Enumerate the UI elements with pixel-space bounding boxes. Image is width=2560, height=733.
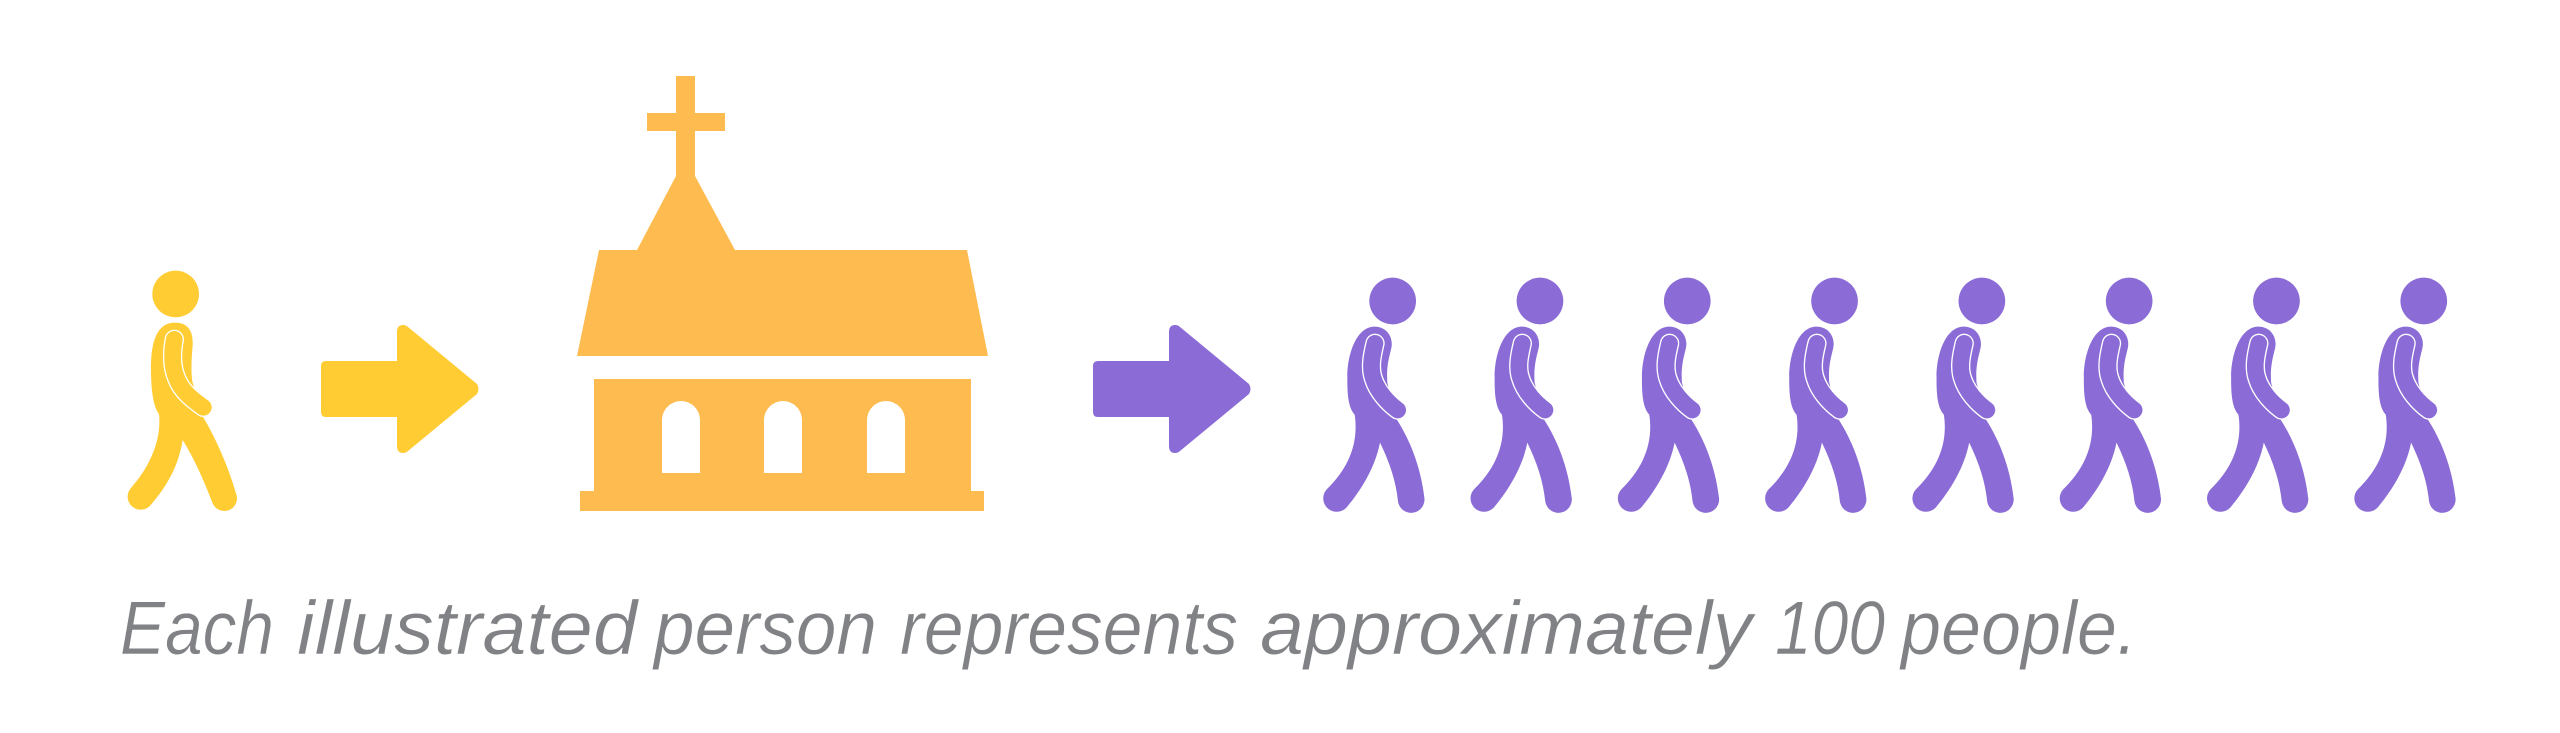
purple person 7 — [2207, 278, 2308, 513]
purple person 2 — [1471, 278, 1572, 513]
caption: 100 — [1775, 586, 1885, 671]
icon: yellow walking person — [128, 271, 237, 511]
caption: person — [652, 586, 877, 671]
purple person 3 — [1618, 278, 1719, 513]
caption: represents — [900, 586, 1238, 671]
caption: people. — [1899, 586, 2137, 671]
caption — [120, 586, 2137, 671]
purple person 8 — [2354, 278, 2456, 513]
purple person 5 — [1912, 278, 2014, 513]
caption: approximately — [1260, 586, 1756, 671]
church body with three arched windows — [580, 379, 984, 511]
church roof with steeple and cross — [577, 76, 988, 356]
purple person 6 — [2060, 278, 2161, 513]
caption: illustrated — [297, 586, 640, 671]
caption: Each — [120, 586, 274, 671]
purple person 1 — [1323, 278, 1425, 513]
purple person 4 — [1765, 278, 1866, 513]
arrow: purple — [1093, 325, 1250, 453]
row of eight purple walking people — [1323, 278, 2456, 513]
icon: church — [577, 76, 988, 511]
arrow: yellow — [321, 325, 478, 453]
